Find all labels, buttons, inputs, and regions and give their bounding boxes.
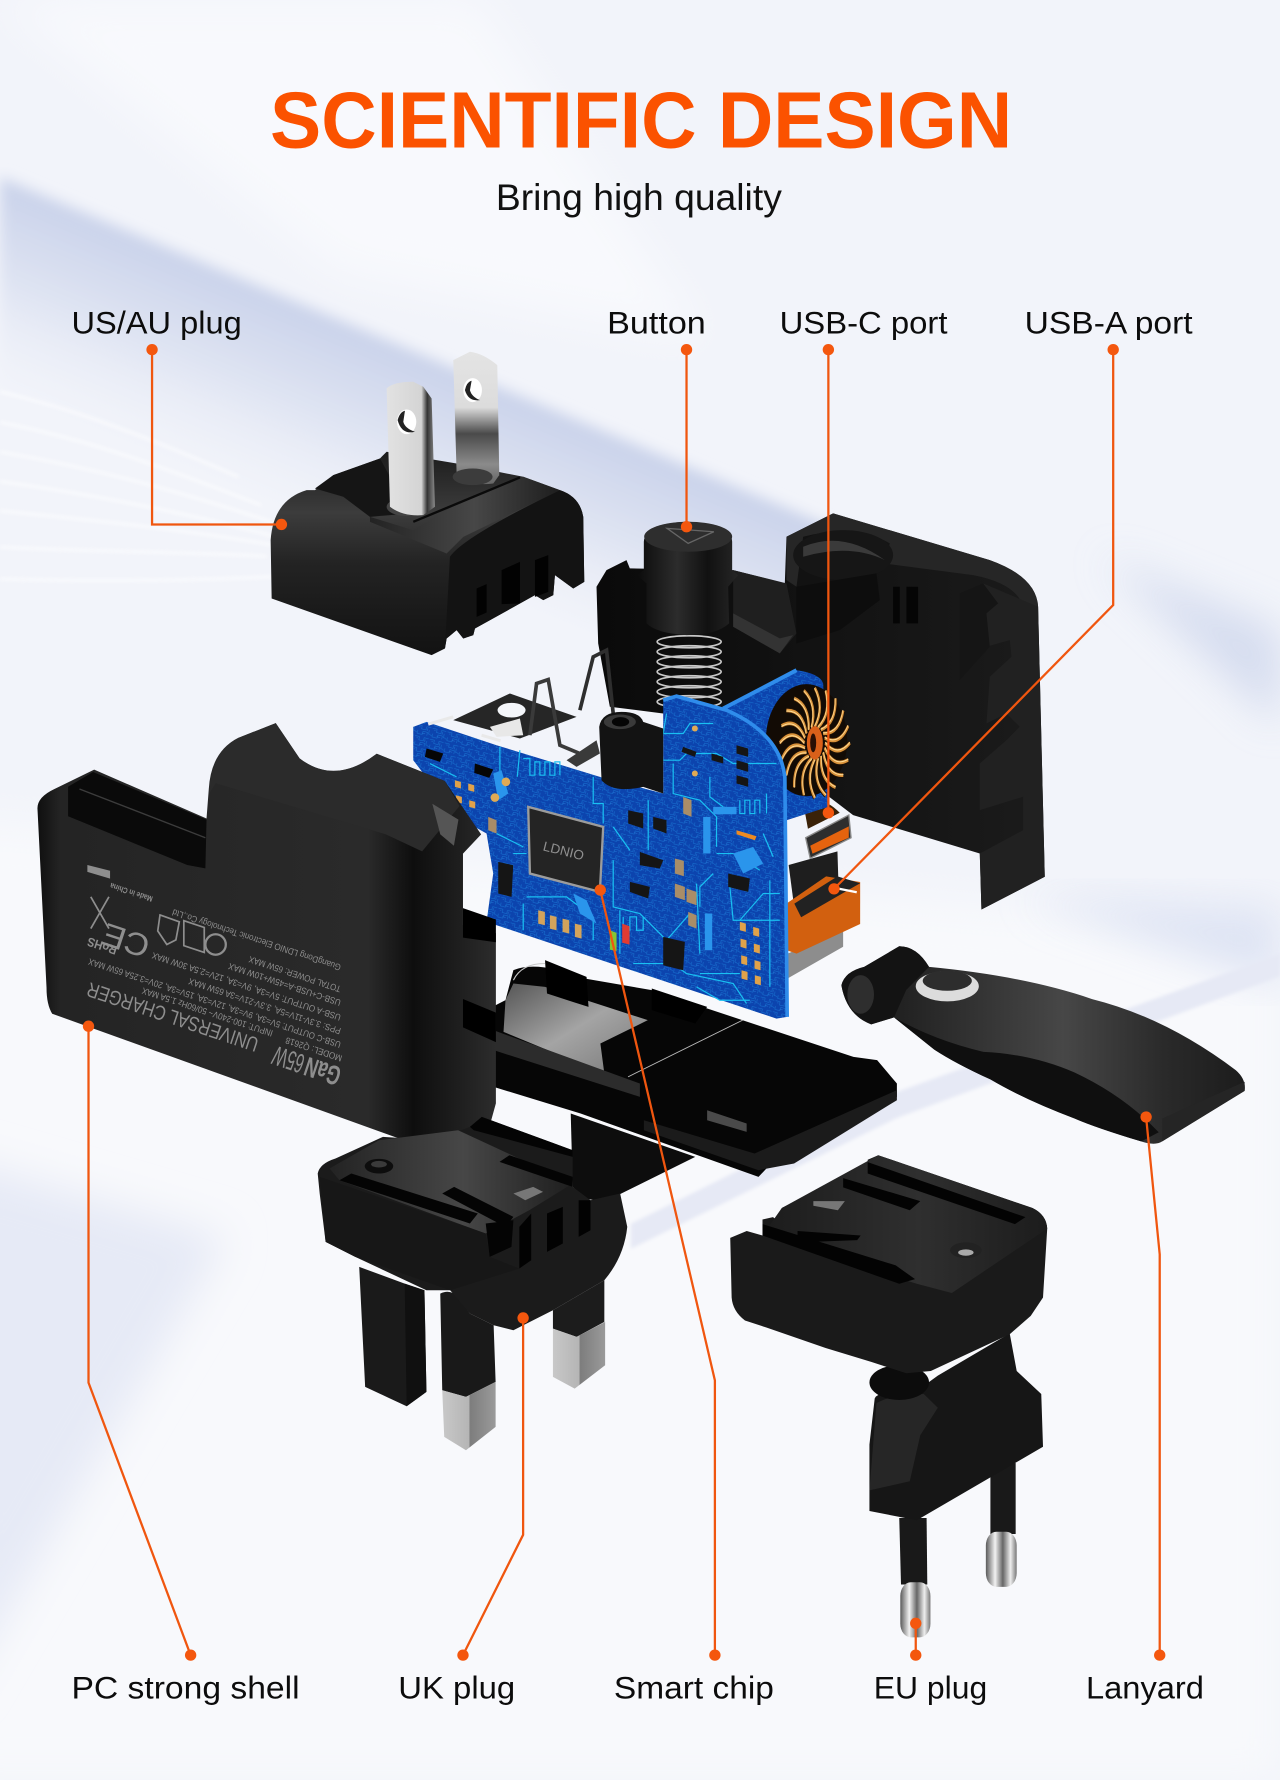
button cap bbox=[637, 522, 738, 635]
spring bbox=[657, 636, 721, 708]
leader dots bbox=[83, 344, 1165, 1661]
label printing bbox=[84, 865, 345, 1092]
EU pins bbox=[899, 1463, 1017, 1637]
leader lines bbox=[89, 350, 1160, 1655]
component: EU plug bbox=[730, 1155, 1047, 1637]
label printing: USB-A OUTPUT: 5V=3A, 9V=3A, 12V=2.5A 30W MAX bbox=[151, 950, 342, 1022]
label printing: MODEL: Q2618 bbox=[284, 1035, 343, 1063]
labels: bottom row: Lanyard bbox=[1086, 1669, 1204, 1705]
label printing: UNIVERSAL CHARGER bbox=[84, 977, 261, 1055]
metal clips bbox=[453, 650, 613, 767]
UK prongs bbox=[359, 1267, 605, 1450]
label printing: PPS: 3.3V-11V=5A, 3.3V-21V=3A 65W MAX bbox=[187, 976, 342, 1036]
subtitle: Bring high quality bbox=[496, 176, 782, 218]
labels: bottom row: Smart chip bbox=[614, 1669, 774, 1705]
smart chip: LDNIO bbox=[541, 839, 586, 863]
component: front shell bbox=[37, 723, 496, 1139]
label printing: Made in China bbox=[109, 881, 154, 903]
EU top body bbox=[730, 1155, 1047, 1373]
prong front bbox=[387, 382, 435, 516]
component: circuit board bbox=[413, 650, 850, 1019]
component: USB ports bbox=[786, 801, 860, 979]
component: spring and button bbox=[637, 522, 738, 708]
label printing: TOTAL POWER: 65W MAX bbox=[248, 954, 342, 994]
labels: bottom row: PC strong shell bbox=[71, 1669, 300, 1705]
label printing: GaN bbox=[300, 1051, 345, 1092]
label printing: GuangDong LDNIO Electronic Technology Co.,Ltd bbox=[171, 907, 342, 973]
labels: top row: Button bbox=[607, 305, 706, 341]
component: UK plug bbox=[318, 1117, 627, 1450]
label printing: USB-C+USB-A=45W+10W MAX bbox=[227, 961, 342, 1008]
black sleeve bbox=[599, 712, 663, 794]
copper coil bbox=[766, 684, 850, 798]
component: US/AU plug bbox=[271, 352, 584, 655]
label printing: USB-C OUTPUT: 5V=3A, 9V=3A, 12V=3A, 15V=3A, 20V=3.25A 65W MAX bbox=[87, 956, 342, 1050]
EU lower body bbox=[869, 1333, 1043, 1520]
label printing: RoHS bbox=[85, 934, 119, 957]
labels: top row: USB-A port bbox=[1025, 305, 1193, 341]
prong rear bbox=[453, 352, 499, 485]
smart chip bbox=[528, 807, 603, 892]
label printing: 65W bbox=[268, 1040, 308, 1079]
component: back housing bbox=[597, 513, 1045, 909]
cyan traces bbox=[430, 714, 780, 1004]
component: lanyard bbox=[841, 946, 1245, 1144]
main board bbox=[413, 696, 787, 1019]
labels: bottom row bbox=[71, 1669, 1204, 1705]
title: SCIENTIFIC DESIGN bbox=[270, 76, 1012, 165]
label printing: CE bbox=[98, 916, 154, 965]
labels: top row: US/AU plug bbox=[71, 305, 242, 341]
label printing: INPUT: 100-240V~ 50/60Hz 1.5A MAX bbox=[141, 986, 274, 1038]
labels: bottom row: UK plug bbox=[398, 1669, 515, 1705]
labels: top row: USB-C port bbox=[780, 305, 948, 341]
left clip squares bbox=[425, 749, 493, 778]
labels: bottom row: EU plug bbox=[874, 1669, 987, 1705]
component: lower tray bbox=[460, 960, 897, 1202]
rear board bbox=[723, 670, 828, 820]
components bbox=[498, 745, 750, 970]
labels: top row bbox=[71, 305, 1193, 341]
